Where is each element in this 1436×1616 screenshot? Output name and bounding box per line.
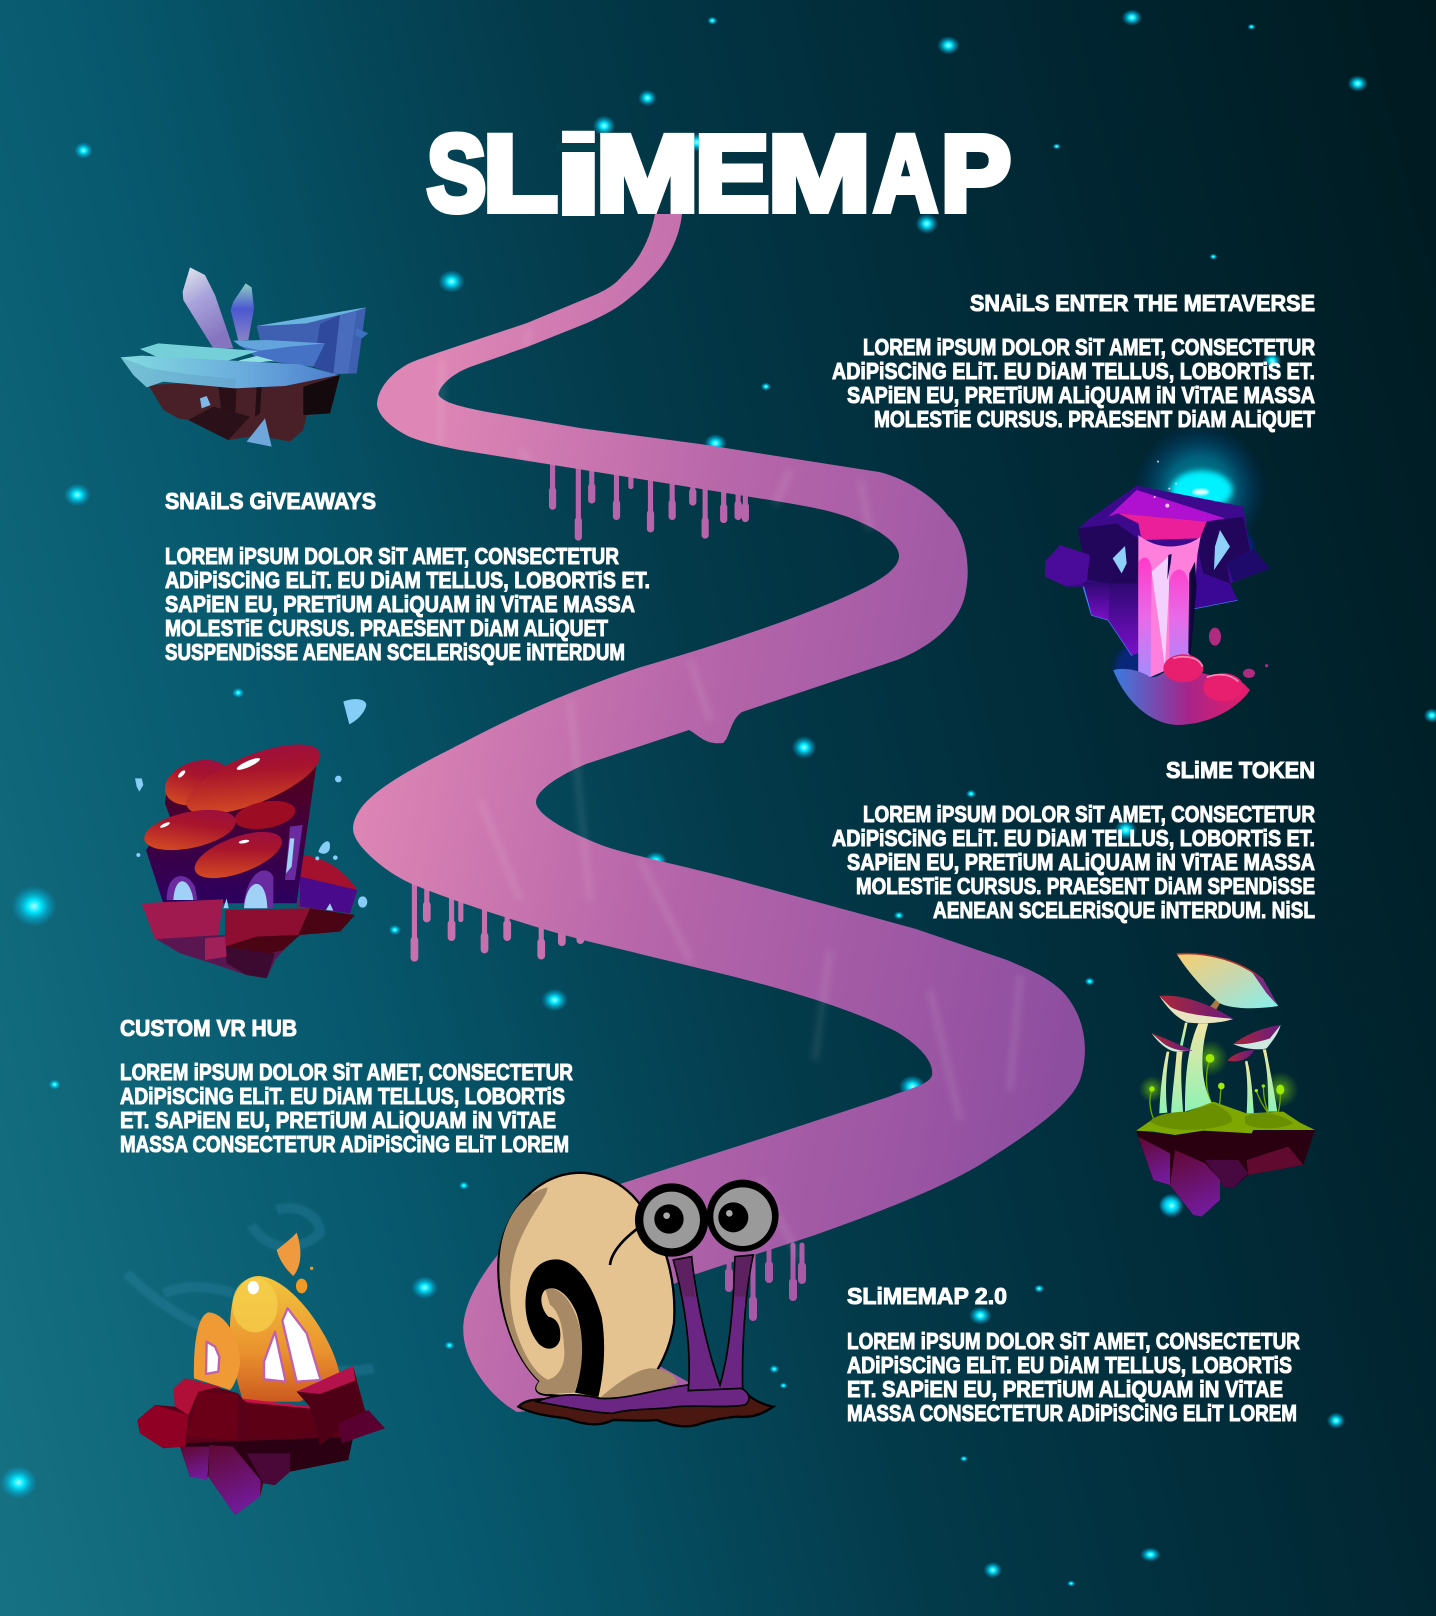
text block: slimemap 2.0: ADiPiSCiNG ELiT. EU DiAM TELLUS, LOBORTiS [847, 1352, 1292, 1378]
text block: custom vr hub: MASSA CONSECTETUR ADiPiSCiNG ELiT LOREM [120, 1131, 569, 1157]
text block: custom vr hub: LOREM iPSUM DOLOR SiT AMET, CONSECTETUR [120, 1059, 573, 1085]
text block: slimemap 2.0: MASSA CONSECTETUR ADiPiSCiNG ELiT LOREM [847, 1400, 1297, 1426]
text block: slimemap 2.0 [847, 1283, 1300, 1426]
snail eye stalks [673, 1255, 753, 1391]
text block: slime token [832, 757, 1315, 923]
title: A [874, 113, 937, 234]
drips under first band [553, 459, 745, 537]
text block: slime token: MOLESTiE CURSUS. PRAESENT DiAM SPENDiSSE [856, 873, 1315, 899]
text block: custom vr hub [120, 1015, 573, 1157]
drips under second band [414, 881, 580, 958]
icon: green glowing mushroom island [1136, 954, 1315, 1218]
text block: snails enter the metaverse: ADiPiSCiNG ELiT. EU DiAM TELLUS, LOBORTiS ET. [832, 358, 1315, 384]
text block: snails giveaways: SAPiEN EU, PRETiUM ALiQUAM iN ViTAE MASSA [165, 591, 635, 617]
title [427, 113, 1011, 236]
text block: slime token: SLiME TOKEN [1166, 757, 1315, 783]
text block: slime token: AENEAN SCELERiSQUE iNTERDUM. NiSL [933, 897, 1315, 923]
text block: snails giveaways [165, 488, 650, 665]
text block: slimemap 2.0: LOREM iPSUM DOLOR SiT AMET, CONSECTETUR [847, 1328, 1300, 1354]
snail foot [518, 1393, 773, 1426]
text block: snails enter the metaverse: SAPiEN EU, PRETiUM ALiQUAM iN ViTAE MASSA [847, 382, 1315, 408]
text block: slimemap 2.0: SLiMEMAP 2.0 [847, 1283, 1007, 1309]
snail shell [498, 1173, 674, 1399]
icon: purple slime waterfall island [1045, 423, 1270, 725]
title: i [556, 115, 601, 236]
text block: custom vr hub: CUSTOM VR HUB [120, 1015, 297, 1041]
drips beside the snail [729, 1245, 802, 1317]
title: M [596, 113, 699, 234]
title: L [483, 114, 558, 234]
snail character [498, 1173, 779, 1426]
title: S [427, 113, 486, 233]
icon: red mushroom crystal island [135, 699, 367, 978]
text block: slime token: SAPiEN EU, PRETiUM ALiQUAM iN ViTAE MASSA [847, 849, 1315, 875]
text block: snails enter the metaverse: MOLESTiE CURSUS. PRAESENT DiAM ALiQUET [874, 406, 1315, 432]
ribbon sheen streaks [440, 330, 1020, 1260]
text block: snails enter the metaverse [832, 290, 1315, 432]
text block: snails giveaways: ADiPiSCiNG ELiT. EU DiAM TELLUS, LOBORTiS ET. [165, 567, 650, 593]
ribbon body [353, 214, 1085, 1412]
title: P [941, 113, 1011, 234]
title: E [695, 114, 769, 234]
text block: slimemap 2.0: ET. SAPiEN EU, PRETiUM ALiQUAM iN ViTAE [847, 1376, 1283, 1402]
text block: custom vr hub: ADiPiSCiNG ELiT. EU DiAM TELLUS, LOBORTiS [120, 1083, 565, 1109]
text block: snails giveaways: SNAiLS GiVEAWAYS [165, 488, 376, 514]
text block: snails enter the metaverse: LOREM iPSUM DOLOR SiT AMET, CONSECTETUR [863, 334, 1315, 360]
slime ribbon path [353, 214, 1085, 1412]
text block: snails enter the metaverse: SNAiLS ENTER THE METAVERSE [970, 290, 1315, 316]
title: M [768, 113, 871, 234]
icon: ice crystal island [121, 267, 368, 447]
snail eyes [635, 1180, 779, 1257]
text block: snails giveaways: SUSPENDiSSE AENEAN SCELERiSQUE iNTERDUM [165, 639, 625, 665]
text block: snails giveaways: LOREM iPSUM DOLOR SiT AMET, CONSECTETUR [165, 543, 619, 569]
text block: custom vr hub: ET. SAPiEN EU, PRETiUM ALiQUAM iN ViTAE [120, 1107, 556, 1133]
icon: amber crystal island [127, 1208, 385, 1515]
text block: slime token: ADiPiSCiNG ELiT. EU DiAM TELLUS, LOBORTiS ET. [832, 825, 1315, 851]
text block: slime token: LOREM iPSUM DOLOR SiT AMET, CONSECTETUR [863, 801, 1315, 827]
text block: snails giveaways: MOLESTiE CURSUS. PRAESENT DiAM ALiQUET [165, 615, 608, 641]
